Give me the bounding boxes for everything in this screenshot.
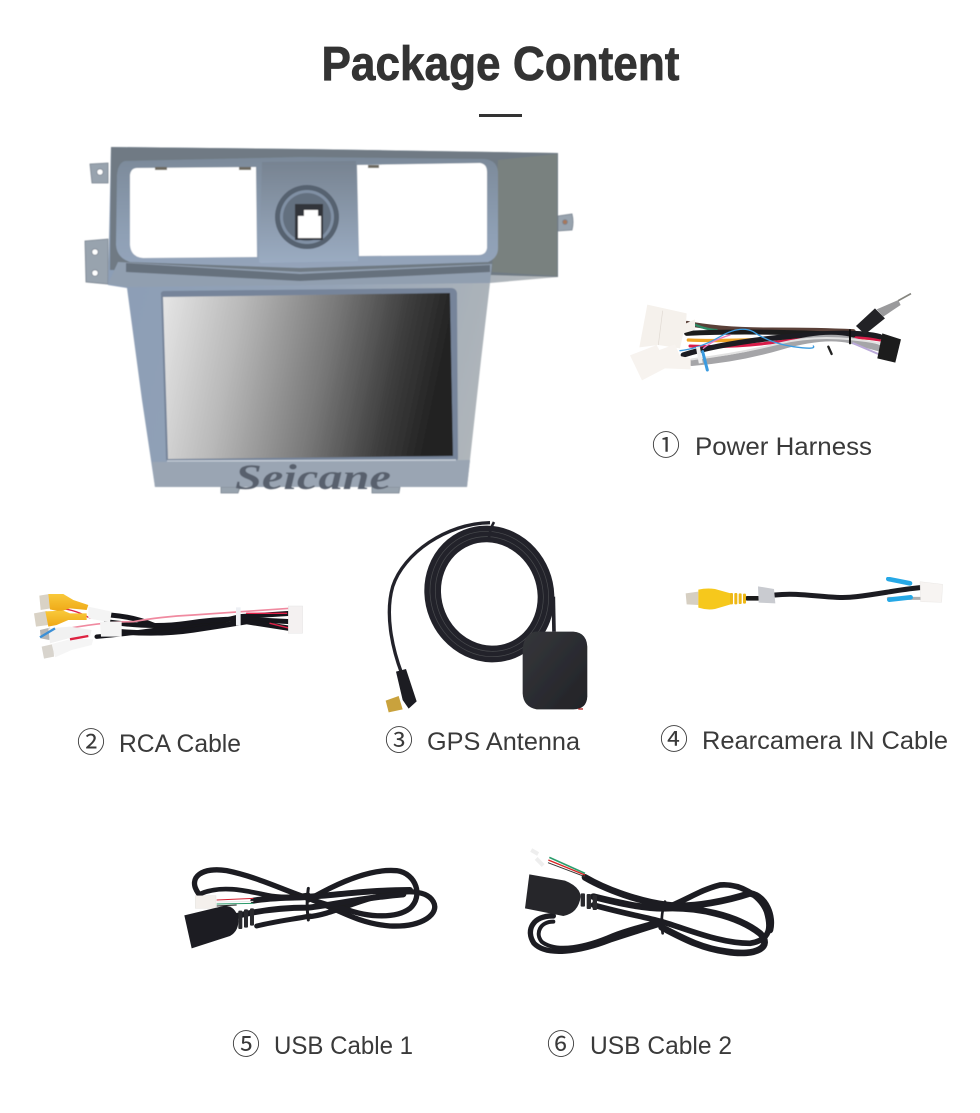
windows: [130, 167, 257, 258]
label: USB cable 1: ⑤: [232, 1023, 260, 1063]
label: RCA cable: ②: [77, 721, 105, 761]
window surround: [116, 157, 498, 268]
label: power harness: Power Harness: [695, 433, 872, 461]
screen: [163, 293, 453, 459]
centre panel: [259, 161, 358, 263]
icon: USB cable 1: [184, 870, 435, 948]
screen bezel: [161, 288, 458, 462]
icon: USB cable 2: [525, 848, 771, 953]
panel: head unit with frame: [85, 147, 573, 497]
frame body: [108, 147, 558, 487]
window clips: [155, 167, 167, 170]
lower band: [152, 460, 470, 487]
title underline: [479, 114, 522, 117]
label: USB cable 2: ⑥: [547, 1023, 575, 1063]
upper dark plate: [110, 147, 558, 277]
label: rearcamera cable: [660, 718, 948, 758]
watermark: Seicane: [235, 457, 391, 497]
label: power harness: ①: [652, 424, 680, 464]
label: GPS antenna: [385, 719, 580, 759]
label: rearcamera cable: Rearcamera IN Cable: [702, 727, 948, 755]
label: USB cable 2: [547, 1023, 732, 1063]
icon: power harness: [630, 294, 911, 380]
label: rearcamera cable: ④: [660, 718, 688, 758]
label: USB cable 2: USB Cable 2: [590, 1032, 732, 1060]
label: USB cable 1: USB Cable 1: [274, 1032, 413, 1060]
label: RCA cable: [77, 721, 241, 761]
label: power harness: [652, 424, 872, 464]
icon: rearcamera cable: [686, 579, 943, 609]
icon: mounting tabs: [85, 163, 573, 493]
icon: GPS antenna: [386, 513, 587, 712]
label: GPS antenna: GPS Antenna: [427, 728, 580, 756]
label: RCA cable: RCA Cable: [119, 730, 241, 758]
label: USB cable 1: [232, 1023, 413, 1063]
title: Package Content: [322, 38, 680, 91]
label: GPS antenna: ③: [385, 719, 413, 759]
icon: RCA cable: [34, 594, 303, 659]
